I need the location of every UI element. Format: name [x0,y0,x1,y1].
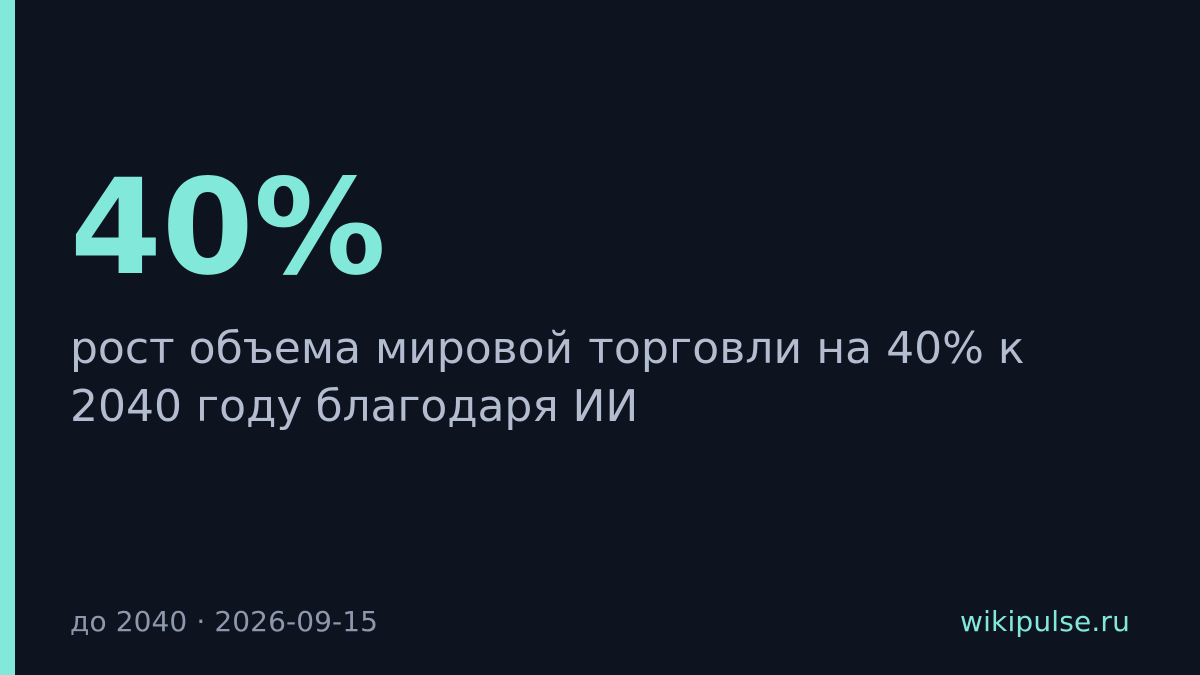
description text [70,323,1024,432]
date line: до 2040 · 2026-09-15 [70,605,378,638]
source: wikipulse.ru [960,605,1130,638]
big number: 40% [70,151,386,305]
description text: 2040 году благодаря ИИ [70,381,638,432]
description text: рост объема мировой торговли на 40% к [70,323,1024,374]
accent bar [0,0,15,675]
